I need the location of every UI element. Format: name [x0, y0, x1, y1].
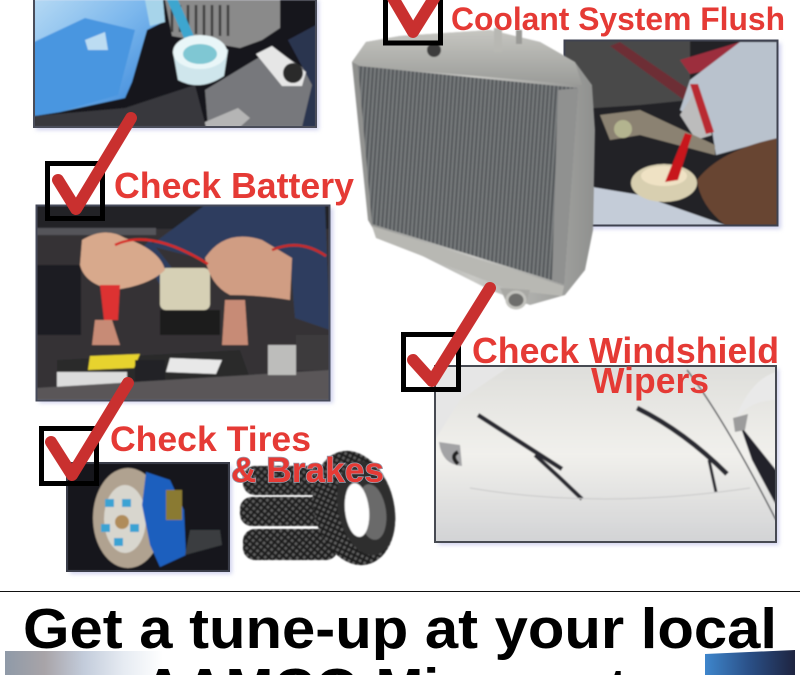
photo: coolant being poured — [564, 40, 781, 229]
checkbox: windshield wipers — [404, 288, 490, 390]
footer banner background — [5, 650, 795, 675]
heading: check windshield wipers: Check Windshield — [472, 330, 779, 371]
photo: snow covered windshield wipers — [435, 366, 779, 545]
heading: check tires and brakes: Check Tires — [110, 420, 311, 459]
heading: check tires and brakes — [111, 426, 384, 483]
icon: stack of tires — [238, 450, 396, 566]
photo: blue brake caliper — [67, 463, 232, 574]
heading: coolant system flush: Coolant System Flush — [451, 1, 785, 37]
heading: check tires and brakes: & Brakes — [231, 451, 384, 490]
headline: get a tune-up — [25, 607, 773, 675]
heading: check windshield wipers — [473, 336, 777, 400]
checkbox: tires and brakes — [42, 383, 128, 484]
checkbox: check battery — [48, 118, 131, 218]
radiator — [352, 28, 595, 308]
heading: check windshield wipers: Wipers — [591, 360, 709, 401]
checkbox: coolant — [386, 0, 440, 43]
photo: jump leads on battery — [36, 205, 333, 403]
heading: check battery: Check Battery — [114, 165, 354, 206]
headline: get a tune-up: Get a tune-up at your local — [23, 597, 777, 661]
footer divider — [0, 591, 800, 592]
photo: pouring washer fluid — [33, 0, 319, 130]
